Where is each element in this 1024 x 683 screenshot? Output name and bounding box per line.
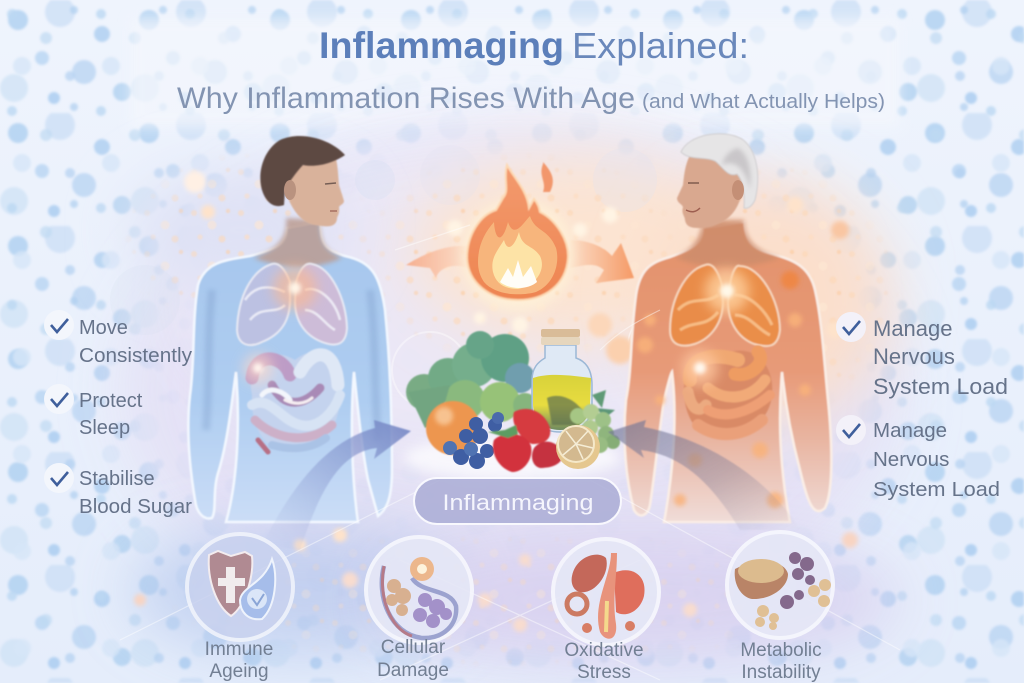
young man body: [188, 222, 392, 522]
older man ear and face details: [686, 180, 744, 212]
young man inflammation glow points: [243, 266, 317, 383]
icon: metabolic instability: [727, 532, 833, 638]
check item: Move Consistently: Consistently: [79, 345, 192, 367]
arrow: right dark arrow into centre: [608, 420, 800, 530]
figure: older man, orange translucent body: [624, 134, 831, 522]
dried citrus slice: [556, 425, 600, 469]
pill label: Inflammaging: [414, 478, 621, 524]
check item: Manage Nervous System Load: Nervous: [873, 344, 955, 369]
label: Oxidative Stress: Stress: [577, 662, 631, 683]
check item: Move Consistently: Move: [79, 317, 128, 339]
check item: Protect Sleep: Sleep: [79, 417, 130, 439]
light streaks: [120, 225, 900, 680]
label: Metabolic Instability: Metabolic: [740, 640, 822, 661]
label: Cellular Damage: Cellular: [381, 637, 446, 658]
title: Inflammaging: [319, 25, 564, 66]
olive oil bottle: [532, 329, 592, 432]
young man lungs: [237, 264, 347, 345]
icon: oxidative stress: [553, 539, 659, 645]
subtitle: (and What Actually Helps): [642, 91, 885, 113]
icon: flame in round drop: [462, 162, 574, 311]
label: Metabolic Instability: [740, 640, 822, 683]
blueberries: [443, 412, 504, 469]
food: greens, oil, fruit: [404, 329, 620, 480]
label: Immune Ageing: Ageing: [209, 661, 269, 682]
figure: young man, blue translucent body: [188, 136, 392, 522]
label: Immune Ageing: Immune: [205, 639, 273, 660]
older man inflammation glow points: [682, 269, 749, 386]
leafy greens: [406, 331, 537, 428]
young man face: [282, 155, 344, 226]
check item: Manage Nervous System Load: System Load: [873, 374, 1008, 399]
check item: Manage Nervous System Load again: System Load: [873, 478, 1000, 501]
young man neck and chest tint: [254, 218, 342, 267]
white table glow: [404, 436, 620, 480]
young man ear and face details: [284, 180, 337, 211]
check item: Stabilise Blood Sugar: Stabilise: [79, 468, 155, 490]
check item: Protect Sleep: [44, 384, 143, 439]
older man lungs: [670, 264, 780, 346]
arrow: flame to older man: [570, 240, 634, 283]
check item: Stabilise Blood Sugar: Blood Sugar: [79, 496, 192, 518]
title: [319, 25, 749, 66]
older man hair shading: [722, 148, 751, 190]
title: Explained:: [572, 25, 749, 66]
pill label: Inflammaging: Inflammaging: [442, 490, 594, 515]
orange: [426, 401, 480, 455]
green grapes and leaves: [570, 390, 620, 453]
large sparkles: [134, 171, 858, 632]
young man hair: [260, 136, 345, 206]
icon row: drivers: [187, 532, 833, 645]
central lavender and peach glow: [110, 130, 900, 665]
label: Immune Ageing: [205, 639, 273, 682]
icon labels: [205, 637, 822, 683]
label: Cellular Damage: Damage: [377, 660, 449, 681]
check item: Move Consistently: [44, 310, 192, 367]
strawberries and raspberry: [488, 409, 563, 472]
older man hair: [681, 134, 758, 208]
checklist: right: [836, 312, 1008, 501]
arrow: left dark arrow into centre: [262, 420, 411, 550]
check item: Manage Nervous System Load: Manage: [873, 316, 953, 341]
check item: Manage Nervous System Load: [836, 312, 1008, 399]
older man neck: [676, 220, 780, 267]
label: Oxidative Stress: [564, 640, 644, 683]
check item: Manage Nervous System Load again: Nervous: [873, 448, 949, 471]
check item: Protect Sleep: Protect: [79, 390, 143, 412]
label: Oxidative Stress: Oxidative: [564, 640, 644, 661]
older man intestines: [684, 350, 772, 438]
older man body: [624, 222, 831, 522]
older man face: [677, 155, 745, 228]
label: Cellular Damage: [377, 637, 449, 681]
check item: Stabilise Blood Sugar: [44, 463, 192, 518]
sparkles field: [132, 168, 888, 652]
arrow: flame to younger man: [406, 246, 468, 278]
check item: Manage Nervous System Load again: Manage: [873, 419, 947, 442]
subtitle: [177, 82, 885, 115]
icon: cellular damage: [366, 537, 472, 643]
subtitle: Why Inflammation Rises With Age: [177, 82, 635, 115]
young man intestines: [251, 352, 341, 452]
young man shoulder shading: [206, 290, 378, 440]
check item: Manage Nervous System Load again: [836, 415, 1000, 501]
label: Metabolic Instability: Instability: [741, 662, 821, 683]
checklist: left: [44, 310, 192, 518]
older man body sparkles: [637, 271, 811, 508]
icon: immune ageing shield and drop: [187, 534, 293, 640]
